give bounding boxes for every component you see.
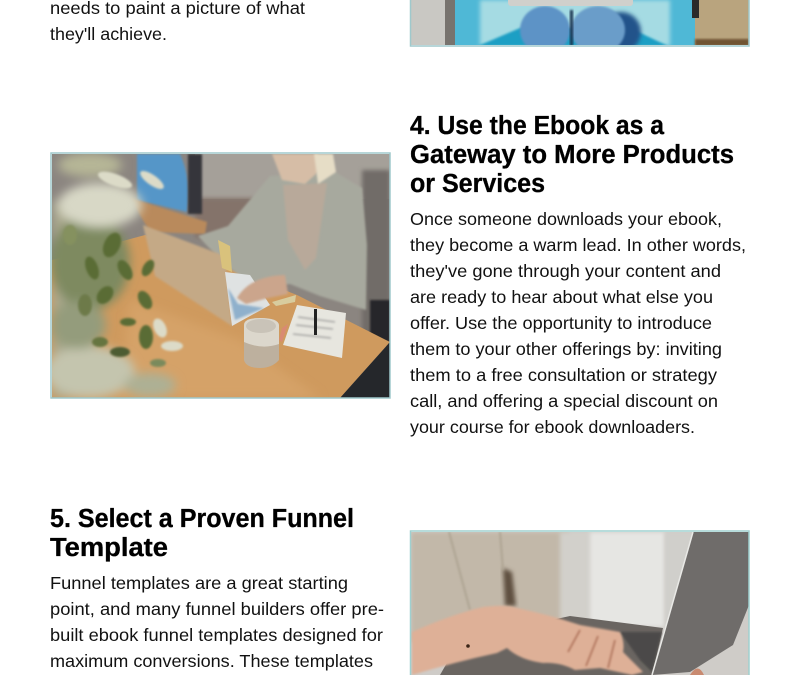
text block: section 4 paragraph: Once someone downloads your ebook, (410, 209, 722, 229)
text block: section 5 paragraph: Funnel templates are a great starting (50, 573, 348, 593)
laptop lid (652, 532, 749, 675)
text block: section 4 paragraph: are ready to hear about what else you (410, 287, 713, 307)
laptop (143, 225, 232, 326)
text block: section 4 paragraph: offer. Use the opportunity to introduce (410, 313, 712, 333)
text block: section 4 paragraph: your course for ebook downloaders. (410, 417, 695, 437)
text block: section 5 paragraph: maximum conversions. These templates (50, 651, 373, 671)
text block: section 4 paragraph: them to a free consultation or strategy (410, 365, 717, 385)
text block: section 5 paragraph: built ebook funnel templates designed for (50, 625, 383, 645)
notebook (283, 305, 346, 358)
keyboard base (440, 616, 663, 675)
heading: section 5: 5. Select a Proven Funnel (50, 505, 354, 533)
text block: end of section 3 paragraph (50, 0, 305, 44)
text block: section 4 paragraph: they become a warm lead. In other words, (410, 235, 746, 255)
text block: section 4 paragraph: they've gone through your content and (410, 261, 721, 281)
image: person in turquoise chair holding a tablet (410, 0, 750, 47)
hand (237, 275, 288, 304)
text block: section 4 paragraph (410, 209, 746, 437)
heading: section 4: Gateway to More Products (410, 141, 734, 169)
heading: section 5 (50, 505, 354, 562)
text block: section 5 paragraph: point, and many funnel builders offer pre- (50, 599, 384, 619)
image: hands typing on a grey laptop (410, 531, 749, 675)
cardigan (198, 172, 367, 310)
mug (244, 318, 279, 368)
heading: section 4: 4. Use the Ebook as a (410, 112, 665, 140)
plant (45, 153, 176, 398)
heading: section 5: Template (50, 534, 168, 562)
hand and arm (412, 606, 643, 675)
text block: section 4 paragraph: call, and offering a special discount on (410, 391, 718, 411)
desk (52, 235, 390, 398)
heading: section 4: or Services (410, 170, 545, 198)
image: woman working on laptop at wooden desk behind a plant (45, 153, 390, 398)
heading: section 4 (410, 112, 734, 198)
text block: section 5 paragraph (50, 573, 384, 671)
text block: section 4 paragraph: them to your other offerings by: inviting (410, 339, 722, 359)
text block: end of section 3 paragraph: they'll achieve. (50, 24, 167, 44)
